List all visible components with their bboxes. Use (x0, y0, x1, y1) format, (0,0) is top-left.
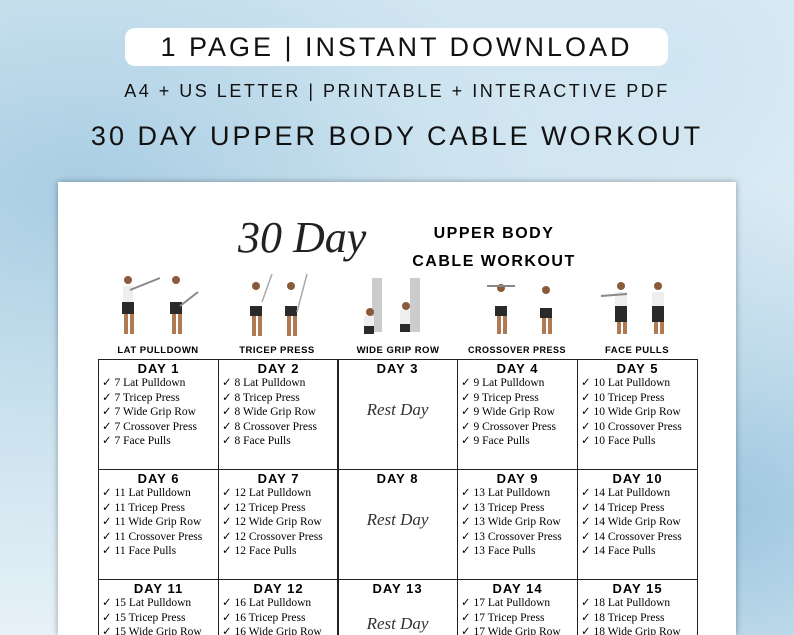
text: FACE PULLS (605, 345, 669, 356)
workout calendar grid: Rest Day (367, 400, 428, 419)
workout calendar grid: ✓ 9 Lat Pulldown (461, 377, 544, 389)
workout calendar grid: DAY 2 (258, 361, 299, 376)
workout calendar grid: ✓ 18 Tricep Press (581, 612, 664, 624)
text: TRICEP PRESS (239, 345, 315, 356)
workout calendar grid: ✓ 13 Face Pulls (461, 545, 535, 557)
workout calendar grid: ✓ 18 Lat Pulldown (581, 597, 670, 609)
subtitle formats: A4 + US LETTER | PRINTABLE + INTERACTIVE PDF (124, 81, 670, 101)
workout calendar grid: ✓ 7 Wide Grip Row (102, 406, 196, 418)
workout calendar grid: ✓ 14 Crossover Press (581, 531, 682, 543)
workout calendar grid: ✓ 17 Tricep Press (461, 612, 544, 624)
workout calendar grid: ✓ 8 Tricep Press (222, 392, 300, 404)
workout calendar grid: ✓ 11 Tricep Press (102, 502, 185, 514)
workout calendar grid: ✓ 8 Crossover Press (222, 421, 317, 433)
workout calendar grid: DAY 1 (138, 361, 179, 376)
paper sheet (58, 182, 736, 635)
workout calendar grid: ✓ 7 Tricep Press (102, 392, 180, 404)
workout calendar grid: ✓ 9 Crossover Press (461, 421, 556, 433)
text: LAT PULLDOWN (117, 345, 199, 356)
workout calendar grid: DAY 11 (134, 581, 183, 596)
main title: 30 DAY UPPER BODY CABLE WORKOUT (91, 121, 703, 151)
workout calendar grid: ✓ 14 Wide Grip Row (581, 516, 681, 528)
workout calendar grid: ✓ 10 Lat Pulldown (581, 377, 670, 389)
text: WIDE GRIP ROW (357, 345, 439, 356)
workout calendar grid: DAY 4 (497, 361, 538, 376)
exercise labels (117, 345, 669, 356)
workout calendar grid: ✓ 9 Wide Grip Row (461, 406, 555, 418)
workout calendar grid: ✓ 7 Crossover Press (102, 421, 197, 433)
workout calendar grid (98, 359, 698, 635)
workout calendar grid: ✓ 13 Lat Pulldown (461, 487, 550, 499)
workout calendar grid: ✓ 11 Lat Pulldown (102, 487, 191, 499)
workout calendar grid: ✓ 12 Crossover Press (222, 531, 323, 543)
workout calendar grid: Rest Day (367, 614, 428, 633)
exercise figures (122, 274, 664, 336)
workout calendar grid: ✓ 10 Wide Grip Row (581, 406, 681, 418)
header pill (125, 28, 668, 66)
workout calendar grid: DAY 13 (372, 581, 423, 596)
sheet title caps (412, 225, 576, 270)
workout calendar grid: ✓ 15 Lat Pulldown (102, 597, 191, 609)
workout calendar grid: ✓ 14 Lat Pulldown (581, 487, 670, 499)
workout calendar grid: ✓ 14 Face Pulls (581, 545, 655, 557)
workout calendar grid: DAY 9 (497, 471, 538, 486)
sheet title script: 30 Day (238, 213, 366, 262)
workout calendar grid: ✓ 9 Tricep Press (461, 392, 539, 404)
workout calendar grid: DAY 3 (377, 361, 418, 376)
workout calendar grid: DAY 7 (258, 471, 299, 486)
workout calendar grid: DAY 10 (612, 471, 663, 486)
workout calendar grid: DAY 6 (138, 471, 179, 486)
workout calendar grid: ✓ 11 Wide Grip Row (102, 516, 201, 528)
workout calendar grid: ✓ 7 Face Pulls (102, 435, 171, 447)
workout calendar grid: ✓ 11 Face Pulls (102, 545, 176, 557)
workout calendar grid: ✓ 17 Lat Pulldown (461, 597, 550, 609)
workout calendar grid: ✓ 9 Face Pulls (461, 435, 530, 447)
workout calendar grid: ✓ 12 Lat Pulldown (222, 487, 311, 499)
workout calendar grid: ✓ 8 Lat Pulldown (222, 377, 305, 389)
workout calendar grid: ✓ 8 Face Pulls (222, 435, 291, 447)
workout calendar grid: ✓ 16 Tricep Press (222, 612, 305, 624)
workout calendar grid: ✓ 11 Crossover Press (102, 531, 202, 543)
workout calendar grid: ✓ 14 Tricep Press (581, 502, 664, 514)
workout calendar grid: ✓ 10 Tricep Press (581, 392, 664, 404)
workout calendar grid: ✓ 12 Face Pulls (222, 545, 296, 557)
workout calendar grid: DAY 5 (617, 361, 658, 376)
text: CROSSOVER PRESS (468, 345, 566, 355)
workout calendar grid: ✓ 7 Lat Pulldown (102, 377, 185, 389)
workout calendar grid: DAY 8 (377, 471, 418, 486)
workout calendar grid: ✓ 15 Tricep Press (102, 612, 185, 624)
sheet title caps: UPPER BODY (434, 225, 554, 242)
workout calendar grid: ✓ 8 Wide Grip Row (222, 406, 316, 418)
workout calendar grid: ✓ 10 Crossover Press (581, 421, 682, 433)
workout calendar grid: ✓ 13 Wide Grip Row (461, 516, 561, 528)
workout calendar grid: DAY 14 (492, 581, 543, 596)
workout calendar grid: ✓ 12 Tricep Press (222, 502, 305, 514)
header pill: 1 PAGE | INSTANT DOWNLOAD (160, 32, 633, 62)
workout calendar grid: ✓ 16 Lat Pulldown (222, 597, 311, 609)
workout calendar grid: ✓ 13 Crossover Press (461, 531, 562, 543)
workout calendar grid: ✓ 13 Tricep Press (461, 502, 544, 514)
workout calendar grid: Rest Day (367, 510, 428, 529)
sheet title caps: CABLE WORKOUT (412, 253, 576, 270)
workout calendar grid: DAY 12 (253, 581, 304, 596)
workout calendar grid: ✓ 12 Wide Grip Row (222, 516, 322, 528)
workout calendar grid: DAY 15 (612, 581, 663, 596)
workout calendar grid: ✓ 10 Face Pulls (581, 435, 655, 447)
